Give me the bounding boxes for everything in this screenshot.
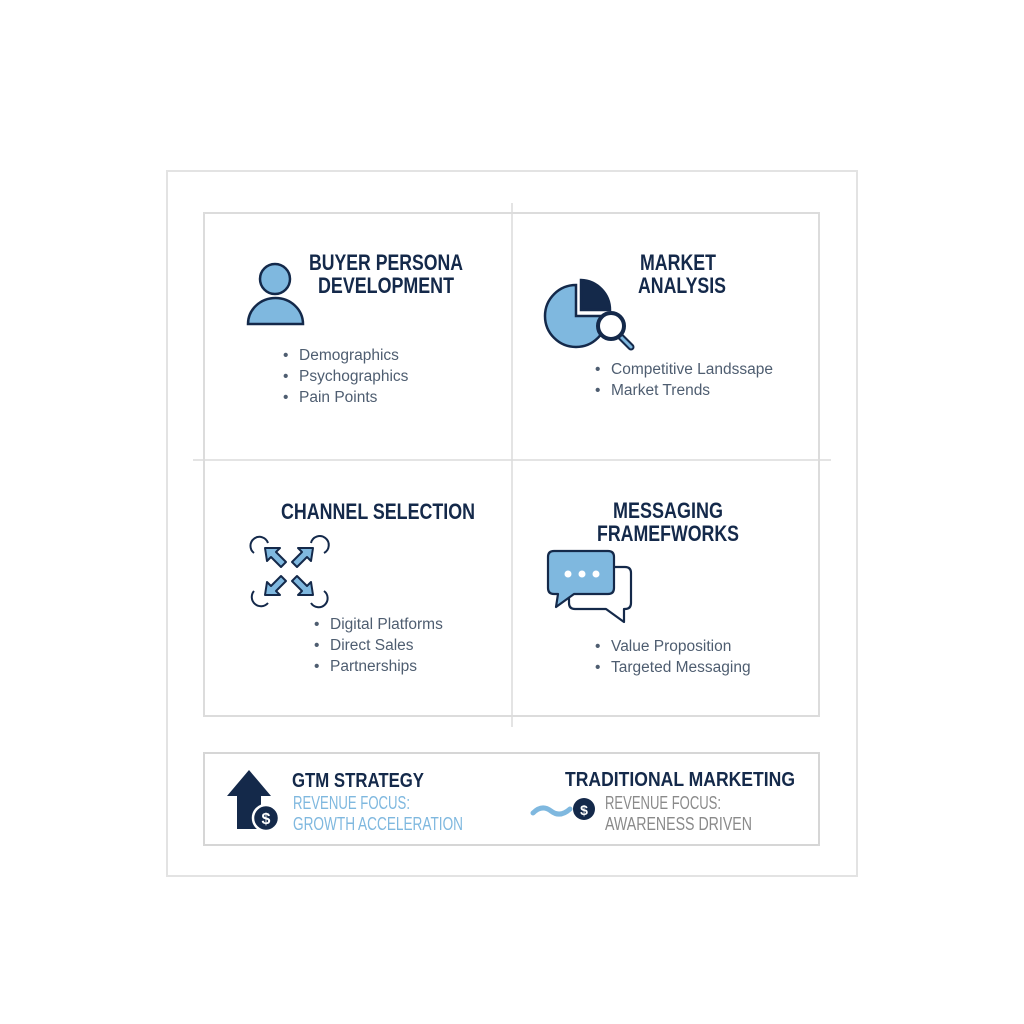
icon: person [248, 264, 303, 324]
bullets: buyer persona: • [283, 368, 288, 385]
traditional text: REVENUE FOCUS: [605, 793, 721, 813]
panel: buyer persona [248, 250, 463, 406]
bullets: market analysis: Competitive Landssape [611, 361, 773, 378]
bullets: market analysis: • [595, 361, 600, 378]
gtm text: GROWTH ACCELERATION [293, 814, 463, 834]
panel: comparison [204, 753, 819, 845]
bullets: buyer persona [283, 347, 409, 406]
bullets: messaging frameworks: Targeted Messaging [611, 659, 751, 676]
icon: up arrow with dollar: $ [262, 811, 271, 828]
bullets: buyer persona: • [283, 347, 288, 364]
heading: market analysis [638, 250, 726, 298]
bullets: channel selection: • [314, 658, 319, 675]
grid panel [193, 203, 831, 727]
bullets: messaging frameworks: Value Proposition [611, 638, 731, 655]
bullets: buyer persona: Psychographics [299, 368, 409, 385]
heading: buyer persona: DEVELOPMENT [318, 273, 454, 298]
bullets: buyer persona: Demographics [299, 347, 399, 364]
panel: market analysis [545, 250, 773, 399]
outer frame [167, 171, 857, 876]
heading: messaging frameworks: FRAMEFWORKS [597, 521, 739, 546]
bullets: market analysis [595, 361, 773, 399]
icon: chat bubbles [548, 551, 631, 622]
traditional text: TRADITIONAL MARKETING [565, 769, 795, 791]
bullets: buyer persona: • [283, 389, 288, 406]
icon: expanding arrows [250, 536, 329, 607]
bullets: channel selection: • [314, 637, 319, 654]
panel: messaging frameworks [548, 498, 751, 676]
bullets: buyer persona: Pain Points [299, 389, 378, 406]
bullets: channel selection: • [314, 616, 319, 633]
bullets: channel selection: Digital Platforms [330, 616, 443, 633]
heading: messaging frameworks [597, 498, 739, 546]
bullets: market analysis: Market Trends [611, 382, 710, 399]
gtm text: REVENUE FOCUS: [293, 793, 410, 813]
heading: channel selection: CHANNEL SELECTION [281, 499, 475, 524]
bullets: messaging frameworks [595, 638, 751, 676]
bullets: market analysis: • [595, 382, 600, 399]
heading: market analysis: ANALYSIS [638, 273, 726, 298]
heading: buyer persona [309, 250, 463, 298]
gtm text [292, 770, 463, 834]
gtm text: GTM STRATEGY [292, 770, 425, 792]
icon: up arrow with dollar [227, 770, 279, 831]
heading: market analysis: MARKET [640, 250, 716, 275]
icon: pie with magnifier [545, 280, 631, 347]
bullets: messaging frameworks: • [595, 659, 600, 676]
traditional text [565, 769, 795, 834]
icon: wave with dollar: $ [580, 802, 588, 818]
bullets: messaging frameworks: • [595, 638, 600, 655]
bullets: channel selection: Partnerships [330, 658, 417, 675]
bullets: channel selection [314, 616, 443, 675]
icon: wave with dollar [533, 798, 595, 820]
dots [564, 570, 600, 578]
heading: buyer persona: BUYER PERSONA [309, 250, 463, 275]
heading: messaging frameworks: MESSAGING [613, 498, 723, 523]
panel: channel selection [250, 499, 475, 675]
bullets: channel selection: Direct Sales [330, 637, 414, 654]
traditional text: AWARENESS DRIVEN [605, 814, 752, 834]
